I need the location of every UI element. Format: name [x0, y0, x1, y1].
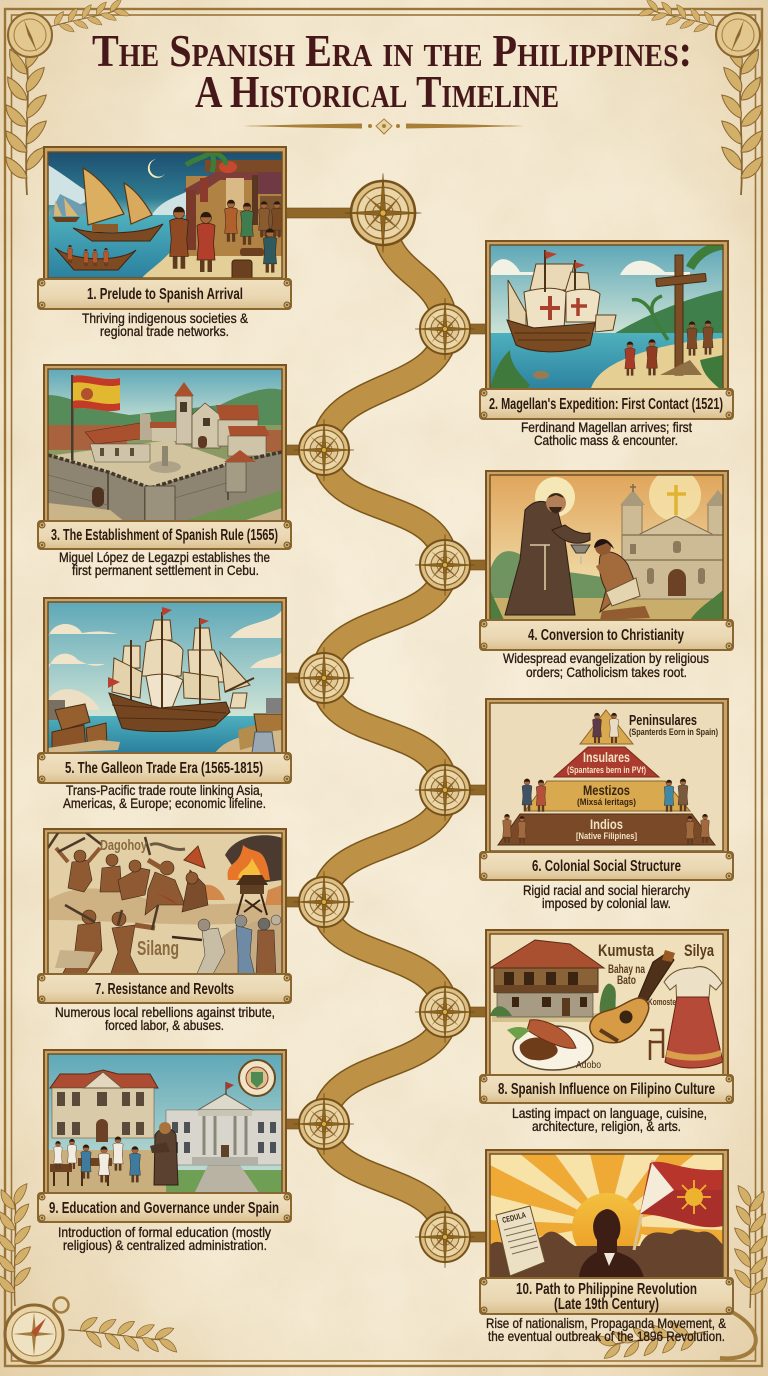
tier: Indios: [Native Filipines] [576, 831, 637, 842]
title divider ornament [243, 119, 525, 134]
tier: Peninsulares: (Spanterds Eorn in Spain) [629, 727, 718, 738]
description: step 6: Rigid racial and social hierarchy [523, 882, 690, 898]
description: step 9 [58, 1224, 271, 1253]
panel 10: Path to Philippine Revolution [480, 1150, 733, 1344]
illustration: friar baptizing convert before church [490, 469, 730, 622]
tier: Peninsulares [580, 710, 718, 744]
description: step 10: the eventual outbreak of the 1896 Revolution. [488, 1328, 725, 1344]
description: step 10 [486, 1315, 727, 1344]
tier: Indios [498, 814, 715, 845]
description: step 10: Rise of nationalism, Propaganda Movement, & [486, 1315, 727, 1331]
description: step 5: Trans-Pacific trade route linking Asia, [66, 782, 263, 798]
illustration: rising sun, flag and silhouettes [490, 1154, 723, 1278]
panel 2: Magellan's Expedition [480, 241, 733, 448]
panel 5: Galleon Trade Era [38, 598, 291, 811]
illustration: trading port at night [48, 152, 282, 280]
label: step 6: 6. Colonial Social Structure [532, 858, 681, 875]
title: The Spanish Era in the Philippines: [92, 25, 692, 76]
chart: social hierarchy pyramid [498, 710, 718, 845]
description: step 4: Widespread evangelization by religious [503, 650, 709, 666]
description: step 8: Lasting impact on language, cuisine, [512, 1105, 707, 1121]
illustration: galleon and cross on shore [490, 245, 723, 393]
corner decoration: bottom right laurel [593, 1183, 768, 1366]
corner decoration: top left laurel and compass [1, 0, 132, 195]
illustration: house, food, guitar, dress: Adobo [576, 1060, 601, 1071]
label: step 4: 4. Conversion to Christianity [528, 627, 684, 644]
tier: Insulares: (Spantares bern in PVf) [567, 765, 646, 776]
label: step 8 [480, 1075, 733, 1103]
description: step 1: Thriving indigenous societies & [82, 310, 249, 326]
illustration: galleon with cargo [48, 602, 282, 753]
title: A Historical Timeline [195, 66, 559, 117]
title [92, 25, 692, 117]
description: step 6: imposed by colonial law. [542, 895, 671, 911]
illustration: battle scene: Dagohoy [100, 837, 147, 854]
description: step 7: Numerous local rebellions against tribute, [55, 1004, 275, 1020]
description: step 3 [59, 549, 270, 578]
description: step 9: religious) & centralized administration. [63, 1237, 267, 1253]
label: step 5: 5. The Galleon Trade Era (1565-1815) [65, 760, 263, 777]
description: step 4: orders; Catholicism takes root. [526, 664, 687, 680]
tier: Mestizos [522, 779, 690, 812]
description: step 5 [63, 782, 266, 811]
compass nodes on the timeline [294, 173, 475, 1268]
label: step 10: 10. Path to Philippine Revolution [516, 1281, 697, 1298]
label: step 3 [38, 521, 291, 549]
description: step 3: first permanent settlement in Cebu. [72, 562, 259, 578]
description: step 2 [521, 419, 692, 448]
description: step 5: Americas, & Europe; economic lifeline. [63, 795, 266, 811]
description: step 8: architecture, religion, & arts. [532, 1118, 681, 1134]
description: step 6 [523, 882, 690, 911]
corner decoration: top right laurel and compass [636, 0, 767, 195]
label: step 5 [38, 753, 291, 783]
panel 4: Conversion to Christianity [480, 469, 733, 680]
description: step 1: regional trade networks. [100, 323, 229, 339]
label: step 1: 1. Prelude to Spanish Arrival [87, 286, 243, 303]
label: step 7: 7. Resistance and Revolts [95, 981, 234, 998]
illustration: walled Spanish settlement [48, 369, 282, 522]
illustration: house, food, guitar, dress: Silya [684, 941, 714, 960]
description: step 3: Miguel López de Legazpi establishes the [59, 549, 270, 565]
tier: Peninsulares: Peninsulares [629, 712, 697, 729]
illustration: house, food, guitar, dress: Bato [617, 973, 636, 987]
label: step 2 [480, 389, 733, 419]
description: step 2: Catholic mass & encounter. [534, 432, 678, 448]
description: step 2: Ferdinand Magellan arrives; first [521, 419, 692, 435]
label: step 10 [480, 1278, 733, 1314]
description: step 8 [512, 1105, 707, 1134]
illustration: house, food, guitar, dress: Komoste [648, 997, 676, 1008]
label: step 9 [38, 1193, 291, 1222]
label: step 10: (Late 19th Century) [554, 1296, 659, 1313]
tier: Insulares [554, 747, 659, 777]
tier: Mestizos: (Mixsá Ieritags) [577, 797, 636, 808]
panel 7: Resistance and Revolts [38, 828, 291, 1033]
panel 9: Education and Governance [38, 1050, 291, 1253]
label: step 6 [480, 852, 733, 880]
connector arms from panels to compass nodes [285, 208, 488, 1242]
illustration: house, food, guitar, dress: Kumusta [598, 941, 654, 960]
label: step 9: 9. Education and Governance under Spain [49, 1200, 279, 1217]
corner decoration: bottom left laurel and pocket compass [0, 1181, 182, 1363]
illustration: battle scene [48, 828, 282, 976]
tier: Mestizos: Mestizos [583, 782, 630, 798]
illustration: house, food, guitar, dress: Bahay na [608, 962, 645, 976]
label: step 4 [480, 620, 733, 650]
illustration: school and government building [48, 1054, 282, 1194]
panel 6: Colonial Social Structure [480, 699, 733, 911]
label: step 1 [38, 279, 291, 309]
illustration: house, food, guitar, dress [490, 934, 723, 1076]
label: step 3: 3. The Establishment of Spanish Rule (1565) [51, 527, 278, 544]
tier: Indios: Indios [590, 816, 623, 832]
panel 1: Prelude to Spanish Arrival [38, 147, 291, 339]
illustration: rising sun, flag and silhouettes: CEDULA [501, 1210, 527, 1225]
panel 8: Spanish Influence on Filipino Culture [480, 930, 733, 1134]
winding timeline path [324, 213, 445, 1237]
label: step 7 [38, 974, 291, 1003]
illustration: battle scene: Silang [137, 938, 179, 960]
panel 3: Establishment of Spanish Rule [38, 365, 291, 578]
tier: Insulares: Insulares [583, 749, 630, 765]
description: step 7: forced labor, & abuses. [105, 1017, 224, 1033]
description: step 7 [55, 1004, 275, 1033]
description: step 4 [503, 650, 709, 680]
description: step 1 [82, 310, 249, 339]
description: step 9: Introduction of formal education (mostly [58, 1224, 271, 1240]
